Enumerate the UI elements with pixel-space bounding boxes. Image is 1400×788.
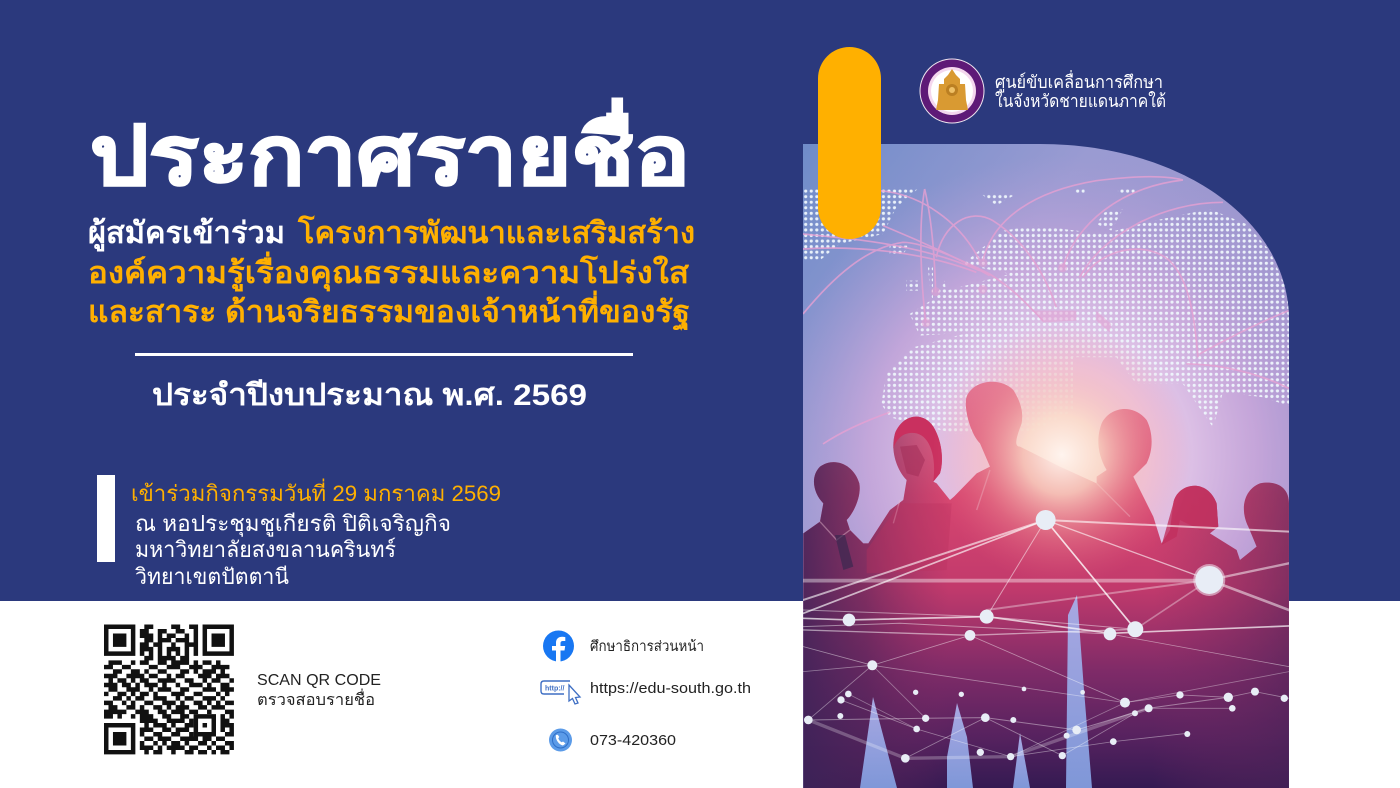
white accent bar <box>97 475 115 562</box>
phone number: 073-420360 <box>590 732 676 749</box>
subtitle line 1 lead: ผู้สมัครเข้าร่วม <box>88 217 285 252</box>
QR caption: ตรวจสอบรายชื่อ <box>257 688 375 709</box>
venue: วิทยาเขตปัตตานี <box>134 564 289 589</box>
backlight glow over figures <box>943 334 1182 566</box>
organization name: ในจังหวัดชายแดนภาคใต้ <box>995 91 1166 111</box>
icon: phone <box>549 728 572 752</box>
center jacket shading <box>867 503 952 573</box>
gaps between legs <box>860 595 1092 788</box>
venue: มหาวิทยาลัยสงขลานครินทร์ <box>135 537 396 562</box>
QR code <box>104 624 234 754</box>
organization name: ศูนย์ขับเคลื่อนการศึกษา <box>995 70 1163 93</box>
venue <box>134 511 451 589</box>
main title: ประกาศรายชื่อ <box>90 98 690 202</box>
icon: web link with cursor <box>541 681 580 704</box>
event date: เข้าร่วมกิจกรรมวันที่ 29 มกราคม 2569 <box>131 478 501 506</box>
subtitle line 1 project name: โครงการพัฒนาและเสริมสร้าง <box>297 214 695 250</box>
organization logo <box>920 58 984 124</box>
right woman long hair <box>1162 486 1218 545</box>
team silhouettes <box>803 382 1289 788</box>
dotted world map <box>804 189 1289 434</box>
navy background <box>0 0 1400 601</box>
icon: facebook <box>543 630 574 662</box>
photo panel: business team and world map <box>803 144 1293 788</box>
subtitle line 2: องค์ความรู้เรื่องคุณธรรมและความโปร่งใส <box>88 251 690 292</box>
white footer band <box>0 601 1400 788</box>
subtitle <box>88 214 695 332</box>
tie <box>835 535 853 570</box>
QR caption: SCAN QR CODE <box>257 672 381 689</box>
network lines <box>803 520 1289 758</box>
collar and tie details <box>820 470 1130 540</box>
fiscal year heading: ประจำปีงบประมาณ พ.ศ. 2569 <box>152 379 587 412</box>
venue: ณ หอประชุมชูเกียรติ ปิติเจริญกิจ <box>135 511 451 537</box>
photo background gradient <box>803 144 1289 788</box>
shading on outer figures <box>803 417 1289 788</box>
woman hair and face <box>893 417 942 482</box>
organization name <box>995 70 1166 111</box>
yellow pill accent <box>818 47 881 239</box>
subtitle line 3: และสาระ ด้านจริยธรรมของเจ้าหน้าที่ของรัฐ <box>88 290 690 332</box>
data modules <box>104 627 234 752</box>
pink connection arcs <box>803 177 1293 444</box>
QR caption <box>257 672 381 709</box>
website URL: https://edu-south.go.th <box>590 680 751 697</box>
people outline <box>803 382 1289 788</box>
facebook page name: ศึกษาธิการส่วนหน้า <box>590 638 704 655</box>
icon: web link with cursor: http:// <box>545 686 564 692</box>
divider rule <box>135 353 633 356</box>
finder patterns <box>104 624 234 754</box>
network nodes <box>804 510 1288 763</box>
